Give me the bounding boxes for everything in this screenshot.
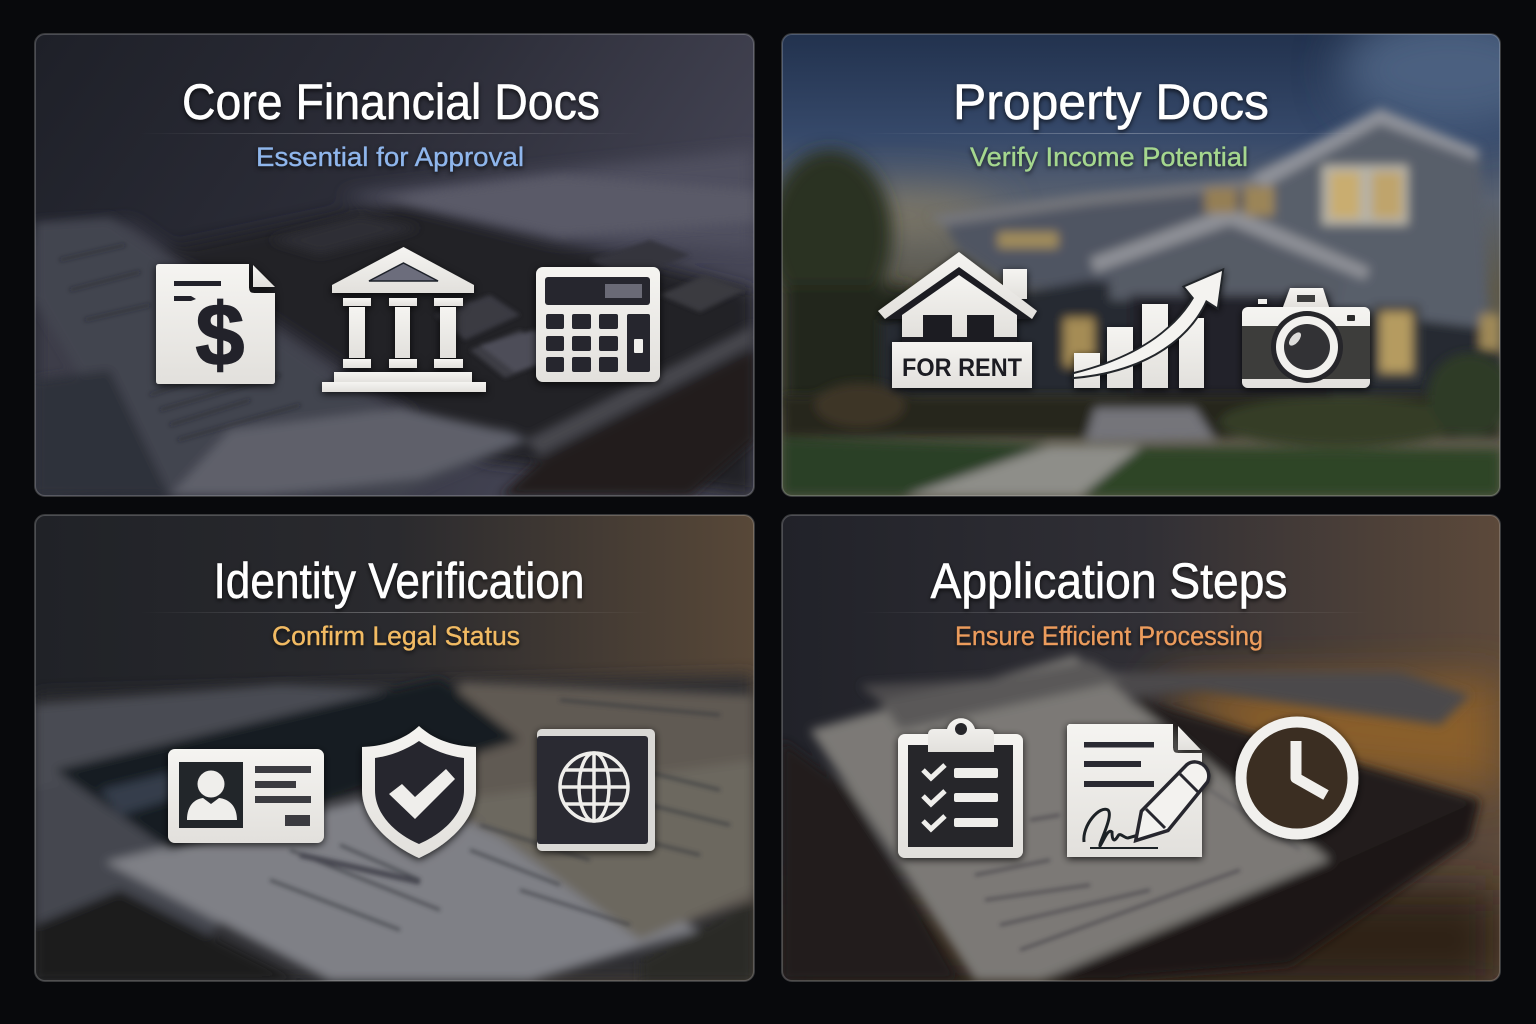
panel: property docs	[768, 10, 1536, 496]
panel: core financial docs	[35, 34, 754, 496]
icon: house for rent: FOR RENT	[902, 354, 1022, 382]
heading: Property Docs	[953, 74, 1269, 130]
panel border	[35, 34, 754, 496]
icon: dollar document: $	[196, 285, 244, 384]
icon: dollar document	[156, 264, 275, 384]
icon: signed document with pen	[1067, 724, 1207, 857]
heading: Identity Verification	[214, 553, 584, 609]
background photo: id documents	[35, 515, 754, 981]
icon: id card	[168, 749, 324, 843]
subheading: Essential for Approval	[256, 142, 524, 172]
icon: shield with check	[362, 726, 476, 858]
heading: Application Steps	[930, 553, 1288, 609]
subheading: Ensure Efficient Processing	[955, 621, 1263, 651]
icon: clipboard checklist	[898, 718, 1023, 858]
icon: clock	[1241, 722, 1353, 834]
panel: application steps	[782, 515, 1500, 990]
icon: rising bar chart with arrow	[1074, 271, 1222, 388]
icon: passport with globe	[537, 729, 655, 851]
icon: house for rent	[878, 252, 1037, 388]
background photo: calculator and papers	[35, 34, 754, 496]
panel border	[35, 515, 754, 981]
heading: Core Financial Docs	[182, 74, 600, 130]
panel border	[782, 515, 1500, 981]
background photo: paperwork on a wooden desk	[782, 515, 1500, 990]
subheading: Confirm Legal Status	[272, 621, 520, 651]
icon: bank building	[322, 247, 486, 392]
subheading: Verify Income Potential	[970, 142, 1248, 172]
background photo: suburban house at dusk	[768, 10, 1536, 496]
icon: camera	[1242, 288, 1370, 388]
panel border	[782, 34, 1500, 496]
icon: calculator	[536, 267, 660, 382]
panel: identity verification	[35, 515, 754, 981]
